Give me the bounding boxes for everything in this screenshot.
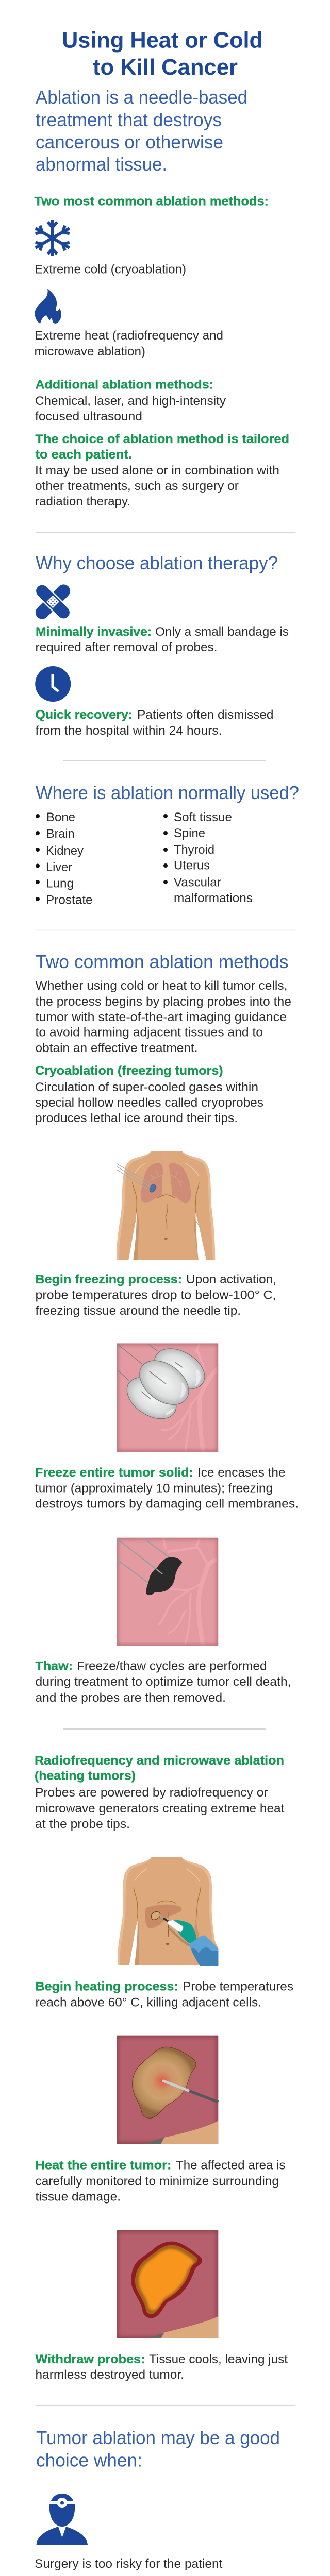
text block: heat entire tumor: tissue damage. [35, 2190, 121, 2204]
heading: two common methods: Two common ablation methods [36, 951, 289, 972]
heading: good choice: choice when: [36, 2450, 142, 2471]
text block: process overview: to avoid harming adjacent tissues and to [35, 1025, 263, 1040]
illustration: destroyed tumor [117, 2230, 219, 2339]
list: right column: Soft tissue [174, 810, 232, 824]
text block: freeze tumor solid: Freeze entire tumor solid: [35, 1466, 193, 1480]
label: extreme cold: Extreme cold (cryoablation) [35, 263, 186, 277]
heading: two most common methods: Two most common ablation methods: [34, 195, 269, 209]
text block: minimally invasive: required after removal of probes. [35, 640, 218, 654]
illustration: ice balls encasing tumor [117, 1341, 221, 1452]
intro text: cancerous or otherwise [36, 131, 223, 152]
text block: process overview: the process begins by placing probes into the [35, 995, 291, 1009]
heading: why choose: Why choose ablation therapy? [36, 552, 278, 573]
text block: heat entire tumor: Heat the entire tumor: [35, 2159, 171, 2172]
text block: begin heating: Begin heating process: [35, 1979, 178, 1994]
text block: begin heating [35, 1979, 293, 2010]
text block: quick recovery [35, 708, 273, 738]
text block: tailored choice: radiation therapy. [35, 495, 130, 509]
label: extreme heat [34, 329, 223, 359]
list: right column: Uterus [174, 858, 210, 873]
text block: process overview [35, 979, 291, 1055]
list: right column: malformations [174, 891, 253, 905]
list: left column: Liver [46, 860, 72, 874]
text block: tailored choice: to each patient. [35, 448, 132, 462]
panel: introduction [33, 28, 289, 509]
text block: withdraw probes: Withdraw probes: [35, 2352, 145, 2366]
intro text: treatment that destroys [36, 109, 222, 130]
illustration: torso with cryoprobes in lung [117, 1151, 215, 1260]
text block: quick recovery: Patients often dismissed [137, 708, 273, 722]
text block: tailored choice: It may be used alone or in combination with [35, 464, 279, 478]
text block: freeze tumor solid [35, 1466, 299, 1511]
text block: thaw: during treatment to optimize tumor cell death, [35, 1675, 291, 1689]
title [62, 28, 263, 80]
text block: minimally invasive: Minimally invasive: [36, 625, 152, 639]
text block: process overview: Whether using cold or heat to kill tumor cells, [35, 979, 288, 993]
list: right column [163, 810, 253, 905]
text block: thaw: Freeze/thaw cycles are performed [77, 1659, 267, 1673]
text block: process overview: obtain an effective treatment. [35, 1041, 198, 1055]
label: extreme heat: microwave ablation) [34, 345, 145, 359]
text block: radiofrequency and microwave: (heating tumors) [35, 1769, 136, 1783]
text block: thaw: Thaw: [35, 1659, 73, 1673]
icon: doctor with head mirror [37, 2494, 88, 2545]
text block: withdraw probes: harmless destroyed tumor. [35, 2368, 184, 2382]
text block: minimally invasive: Only a small bandage is [155, 625, 289, 639]
text block: begin freezing: Upon activation, [186, 1273, 276, 1286]
text block: heat entire tumor [35, 2159, 286, 2204]
list: left column: Prostate [46, 893, 93, 907]
text block: begin heating: Probe temperatures [183, 1979, 293, 1994]
list: left column [36, 810, 93, 907]
text block: additional methods: focused ultrasound [35, 410, 142, 423]
intro text: Ablation is a needle-based [36, 87, 248, 108]
label: surgery too risky: Surgery is too risky for the patient [35, 2557, 223, 2571]
text block: additional methods: Additional ablation methods: [35, 378, 213, 392]
list: right column: Vascular [174, 876, 221, 890]
text block: cryoablation: produces lethal ice around their tips. [35, 1111, 238, 1125]
intro text: abnormal tissue. [36, 154, 167, 175]
heading: good choice [36, 2427, 280, 2471]
text block: process overview: tumor with state-of-the-art imaging guidance [35, 1010, 287, 1024]
panel: two common methods [35, 951, 299, 2382]
text block: tailored choice: other treatments, such as surgery or [35, 479, 239, 493]
text block: additional methods: Chemical, laser, and high-intensity [35, 394, 226, 408]
text block: additional methods [35, 378, 226, 423]
text block: radiofrequency and microwave: Radiofrequency and microwave ablation [35, 1754, 284, 1768]
text block: quick recovery: from the hospital within 24 hours. [35, 724, 222, 738]
text block: withdraw probes [35, 2352, 288, 2382]
panel: where ablation is used [36, 782, 299, 907]
list: left column: Lung [46, 877, 74, 891]
heading: good choice: Tumor ablation may be a good [36, 2427, 280, 2448]
text block: cryoablation: special hollow needles called cryoprobes [35, 1096, 263, 1110]
illustration: heating tumor with probe [117, 2036, 219, 2144]
text block: cryoablation: Cryoablation (freezing tumors) [35, 1064, 223, 1078]
panel: good choice when [31, 2427, 280, 2576]
illustration: thawed black tumor [117, 1538, 221, 1646]
list: left column: Kidney [46, 844, 84, 858]
heading: where used: Where is ablation normally used? [36, 782, 299, 803]
text block: thaw: and the probes are then removed. [35, 1691, 226, 1705]
text block: radiofrequency and microwave: Probes are powered by radiofrequency or [35, 1786, 268, 1800]
text block: begin heating: reach above 60° C, killing adjacent cells. [35, 1996, 261, 2010]
text block: tailored choice: The choice of ablation method is tailored [35, 432, 289, 446]
text block: quick recovery: Quick recovery: [35, 708, 133, 722]
list: left column: Bone [46, 810, 75, 824]
list: right column: Thyroid [174, 843, 214, 857]
text block: radiofrequency and microwave: at the probe tips. [35, 1817, 130, 1831]
text block: radiofrequency and microwave [35, 1754, 285, 1831]
text block: cryoablation [35, 1064, 263, 1125]
icon: flame [35, 289, 61, 324]
text block: thaw [35, 1659, 291, 1705]
text block: heat entire tumor: The affected area is [176, 2159, 286, 2172]
icon: clock [35, 666, 71, 702]
text block: freeze tumor solid: tumor (approximately 10 minutes); freezing [35, 1482, 273, 1496]
panel: why choose ablation [33, 552, 289, 738]
icon: bandage [33, 582, 73, 622]
text block: begin freezing [35, 1273, 276, 1318]
text block: begin freezing: probe temperatures drop to below-100° C, [35, 1289, 276, 1302]
text block: tailored choice [35, 432, 289, 509]
text block: heat entire tumor: carefully monitored to minimize surrounding [35, 2175, 279, 2189]
intro text [36, 87, 248, 175]
text block: withdraw probes: Tissue cools, leaving just [149, 2352, 288, 2366]
text block: minimally invasive [35, 625, 289, 654]
text block: begin freezing: freezing tissue around the needle tip. [35, 1304, 241, 1318]
list: right column: Spine [174, 826, 205, 840]
icon: snowflake [33, 220, 72, 256]
title: to Kill Cancer [93, 55, 238, 80]
title: Using Heat or Cold [62, 28, 263, 53]
label: extreme heat: Extreme heat (radiofrequency and [35, 329, 223, 343]
list: left column: Brain [46, 827, 74, 841]
illustration: torso with heat probe in liver [118, 1857, 218, 1966]
text block: begin freezing: Begin freezing process: [35, 1273, 182, 1286]
text block: radiofrequency and microwave: microwave generators creating extreme heat [35, 1802, 285, 1816]
text block: freeze tumor solid: Ice encases the [197, 1466, 286, 1480]
text block: freeze tumor solid: destroys tumors by damaging cell membranes. [35, 1497, 299, 1511]
text block: cryoablation: Circulation of super-cooled gases within [35, 1080, 258, 1094]
